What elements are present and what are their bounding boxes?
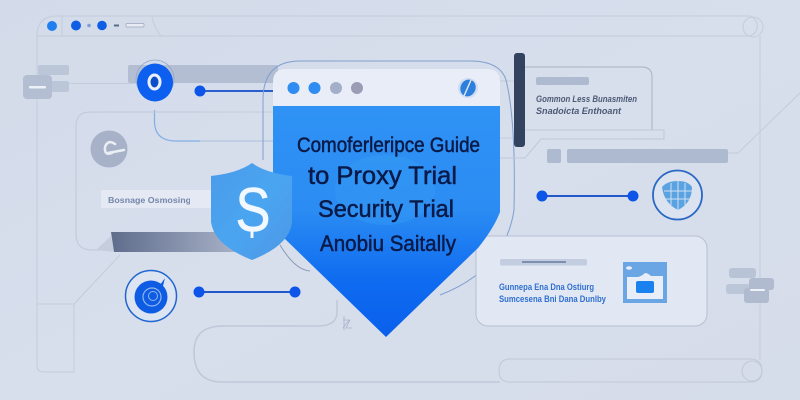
- window dots: [288, 82, 363, 94]
- card text: Gunnepa Ena Dna Ostiurg: [499, 282, 594, 292]
- icon: grey c badge: [90, 130, 128, 168]
- dark shaded bar: [111, 232, 240, 252]
- outline behind main shield: [263, 61, 514, 295]
- top grey bar: [128, 65, 278, 83]
- outline bottom left of shield: [280, 245, 310, 271]
- title: [297, 134, 480, 256]
- bottom right pill: [0, 359, 762, 382]
- panel: top right card: Snadoicta Enthoant: [536, 106, 622, 116]
- panel: top right card: Gommon Less Bunasmiten: [536, 94, 637, 104]
- card heading bar: [500, 259, 587, 266]
- label box: Bosnage Osmosing: [108, 195, 191, 205]
- panel: bottom right card: [476, 236, 707, 326]
- label box: [101, 190, 216, 208]
- main shield: [273, 69, 500, 337]
- connector: top left line: [194, 86, 273, 96]
- icon: globe shield: [653, 170, 702, 220]
- title: Security Trial: [318, 196, 454, 223]
- dark vertical pillar: [514, 53, 525, 147]
- connector: right line: [536, 190, 638, 202]
- title: Anobiu Saitally: [320, 231, 456, 256]
- small qr glyph: [343, 316, 352, 330]
- panel: top right card: [500, 67, 664, 158]
- horizontal guide lines: [200, 81, 520, 141]
- panel: left card: [76, 112, 300, 252]
- shield blue body: [273, 106, 500, 337]
- lane bar behind shield: [190, 190, 220, 208]
- icon: window badge: [458, 77, 478, 99]
- connector: lower left line: [194, 286, 300, 298]
- card text: Sumcesena Bni Dana Dunlby: [499, 294, 606, 304]
- shield window header: [273, 69, 500, 106]
- title: Comoferleripce Guide: [297, 134, 480, 157]
- icon: target node: [126, 270, 176, 322]
- icon: tag stack top left: [23, 65, 137, 99]
- small dollar shield: [211, 163, 292, 260]
- icon: location pin node: [136, 60, 273, 141]
- toolbar dots: [47, 20, 144, 31]
- title: to Proxy Trial: [308, 162, 457, 190]
- icon: browser window: [623, 262, 667, 303]
- small dollar shield: S: [236, 176, 270, 245]
- connector: curved bottom pipe: [194, 300, 500, 382]
- icon: tag stack right: [726, 268, 774, 303]
- right grey bar: [547, 149, 728, 163]
